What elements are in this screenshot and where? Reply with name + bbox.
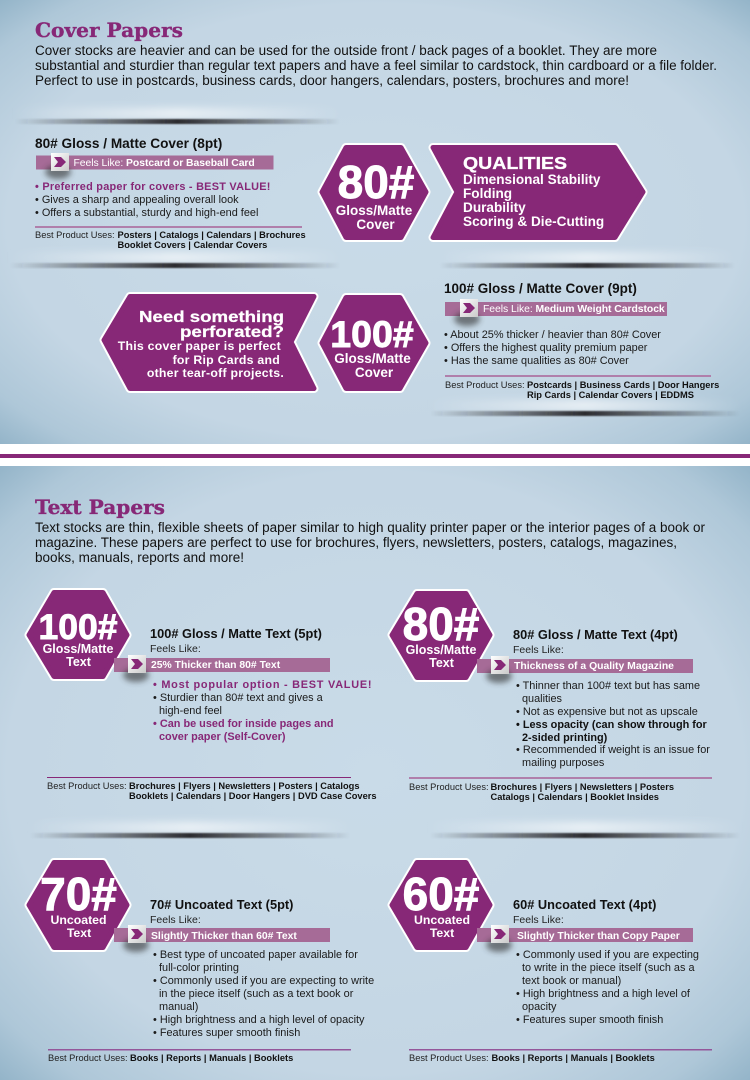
badge: 70# uncoated: Text [67,926,91,940]
feels-like bar [477,925,693,952]
bullet list: • Gives a sharp and appealing overall look [35,194,239,206]
bullet list: qualities [522,693,563,705]
best product uses: Rip Cards | Calendar Covers | EDDMS [527,390,694,400]
bullet list: • High brightness and a high level of opacity [153,1014,365,1026]
badge: 100# text: Text [66,655,92,669]
best product uses [48,1053,293,1063]
bullet list: 2-sided printing) [522,732,608,744]
best product uses: Catalogs | Calendars | Booklet Insides [490,792,659,802]
badge: 80# text: Gloss/Matte [406,643,476,657]
intro text: cover papers: Cover stocks are heavier and can be used for the outside front / back pages of a booklet. They are more [35,43,657,58]
bullet list: full-color printing [159,962,239,974]
intro text: text papers: books, manuals, reports and more! [35,550,244,565]
bullet list: text book or manual) [522,975,621,987]
bullet list: • Offers a substantial, sturdy and high-end feel [35,207,258,219]
bullet list: • Has the same qualities as 80# Cover [444,355,629,367]
feels-like bar: Feels Like: Postcard or Baseball Card [74,158,255,169]
panel: 100# gloss/matte cover details [444,281,719,400]
bullet list: • Thinner than 100# text but has same [516,680,700,692]
badge: 80# text: Text [429,656,455,670]
intro text: text papers [35,520,705,565]
bullet list: • Commonly used if you are expecting [516,949,699,961]
best product uses: Brochures | Flyers | Newsletters | Posters [490,782,674,792]
panel background: text papers [0,466,750,1080]
bullet list: • Recommended if weight is an issue for [516,744,710,756]
bullet list [516,680,710,769]
bullet list [153,679,372,743]
panel: 70# uncoated text [29,862,374,1063]
arrow: need something perforated: other tear-off projects. [147,366,284,380]
best product uses: Books | Reports | Manuals | Booklets [130,1053,293,1063]
arrow: qualities: Scoring & Die-Cutting [463,214,604,229]
best product uses [409,782,674,802]
intro text: cover papers [35,43,717,88]
heading: 100# cover: 100# Gloss / Matte Cover (9pt) [444,281,637,296]
bullet list: • Preferred paper for covers - BEST VALUE! [35,181,271,193]
section divider band [0,444,750,466]
badge: 100# gloss/matte cover: Cover [355,365,394,380]
best product uses: Best Product Uses: [47,781,127,791]
best product uses: Booklets | Calendars | Door Hangers | DVD Case Covers [129,791,377,801]
badge: 100# gloss/matte cover: 100# [330,313,414,355]
bullet list: • Features super smooth finish [153,1027,300,1039]
arrow: need something perforated [104,296,314,388]
best product uses [35,230,306,250]
arrow: qualities: QUALITIES [463,153,567,173]
bullet list [35,181,271,219]
badge: 100# text: 100# [39,607,118,647]
intro text: text papers: magazine. These papers are perfect to use for brochures, flyers, newsletters, posters, catalogs, magazines, [35,535,677,550]
badge: 60# uncoated: 60# [403,868,479,920]
badge: 80# text [392,594,490,678]
best product uses: Best Product Uses: [409,782,489,792]
best product uses: Best Product Uses: [35,230,115,240]
feels-like bar: Feels Like: Medium Weight Cardstock [483,304,665,315]
feels-like bar: Thickness of a Quality Magazine [514,661,674,672]
feels-like bar [445,299,667,326]
heading: Text Papers: Text Papers [35,495,165,519]
bullet list: • Not as expensive but not as upscale [516,706,698,718]
best product uses: Brochures | Flyers | Newsletters | Posters | Catalogs [129,781,360,791]
panel background: cover papers [0,0,750,444]
panel: 60# uncoated text [392,862,712,1063]
best product uses: Best Product Uses: [409,1053,489,1063]
bullet list: • Less opacity (can show through for [516,719,708,731]
bullet list: • Most popular option - BEST VALUE! [153,679,372,691]
badge: 100# gloss/matte cover [322,298,426,388]
best product uses [445,380,719,400]
feels-like bar [36,153,274,179]
best product uses: Booklet Covers | Calendar Covers [118,240,267,250]
bullet list [153,949,374,1039]
badge: 60# uncoated [392,862,490,948]
bullet list: to write in the piece itself (such as a [522,962,695,974]
badge: 60# uncoated: Text [430,926,454,940]
badge: 100# text: Gloss/Matte [43,642,113,656]
feels-like bar [114,925,330,952]
badge: 80# gloss/matte cover [322,148,426,238]
panel: 80# gloss/matte cover details [35,136,306,250]
arrow: need something perforated: perforated? [180,324,284,341]
best product uses: Books | Reports | Manuals | Booklets [492,1053,655,1063]
arrow: qualities: Folding [463,186,512,201]
intro text: cover papers: substantial and sturdier than regular text papers and have a feel similar to cardstock, thin cardboard or a file folder. [35,58,717,73]
arrow: need something perforated: Need something [139,309,284,326]
best product uses: Posters | Catalogs | Calendars | Brochures [118,230,306,240]
bullet list: opacity [522,1001,557,1013]
intro text: text papers: Text stocks are thin, flexible sheets of paper similar to high quality printer paper or the interior pages of a book or [35,520,705,535]
bullet list: • Best type of uncoated paper available for [153,949,358,961]
heading: 70# Uncoated Text (5pt) [150,897,293,912]
intro text: cover papers: Perfect to use in postcards, business cards, door hangers, calendars, posters, brochures and more! [35,73,629,88]
heading: Cover Papers: Cover Papers [35,18,183,42]
heading: 60# Uncoated Text (4pt) [513,897,656,912]
badge: 80# gloss/matte cover: 80# [338,156,414,208]
bullet list: • Offers the highest quality premium paper [444,342,648,354]
bullet list: • About 25% thicker / heavier than 80# Cover [444,329,661,341]
bullet list: cover paper (Self-Cover) [159,731,286,743]
bullet list: manual) [159,1001,198,1013]
panel: 70# uncoated text: Feels Like: [150,914,201,926]
best product uses: Best Product Uses: [445,380,525,390]
panel: 100# text [29,592,377,801]
badge: 80# text: 80# [403,598,479,650]
feels-like bar: Slightly Thicker than Copy Paper [517,931,680,942]
badge: 80# gloss/matte cover: Gloss/Matte [336,203,413,218]
feels-like bar [114,655,330,682]
bullet list: • High brightness and a high level of [516,988,691,1000]
feels-like bar [477,656,693,683]
bullet list: in the piece itself (such as a text book or [159,988,354,1000]
panel: 80# text: Feels Like: [513,644,564,656]
bullet list: • Sturdier than 80# text and gives a [153,692,324,704]
badge: 100# text [29,592,127,676]
bullet list [516,949,699,1026]
heading: 80# Gloss / Matte Text (4pt) [513,627,678,642]
best product uses: Postcards | Business Cards | Door Hangers [527,380,719,390]
heading: 80# cover: 80# Gloss / Matte Cover (8pt) [35,136,222,151]
best product uses [409,1053,655,1063]
badge: 100# gloss/matte cover: Gloss/Matte [334,351,411,366]
badge: 60# uncoated: Uncoated [414,913,470,927]
panel: 60# uncoated text: Feels Like: [513,914,564,926]
best product uses [47,781,377,801]
arrow: need something perforated: for Rip Cards and [173,353,280,367]
badge: 70# uncoated: Uncoated [50,913,107,927]
best product uses: Best Product Uses: [48,1053,128,1063]
bullet list [444,329,661,367]
bullet list: • Features super smooth finish [516,1014,663,1026]
badge: 70# uncoated: 70# [40,868,117,920]
arrow: qualities: Durability [463,200,526,215]
arrow: need something perforated: This cover paper is perfect [118,339,281,353]
arrow: qualities [433,148,643,238]
feels-like bar: Slightly Thicker than 60# Text [151,931,297,942]
panel: 80# text [392,594,712,802]
panel: 100# text: Feels Like: [150,643,201,655]
bullet list: • Can be used for inside pages and [153,718,334,730]
shadow dividers [10,108,740,838]
feels-like bar: 25% Thicker than 80# Text [151,660,281,671]
bullet list: mailing purposes [522,757,605,769]
badge: 70# uncoated [29,862,127,948]
arrow: qualities: Dimensional Stability [463,172,601,187]
bullet list: high-end feel [159,705,222,717]
badge: 80# gloss/matte cover: Cover [356,217,395,232]
heading: 100# Gloss / Matte Text (5pt) [150,626,322,641]
bullet list: • Commonly used if you are expecting to write [153,975,374,987]
